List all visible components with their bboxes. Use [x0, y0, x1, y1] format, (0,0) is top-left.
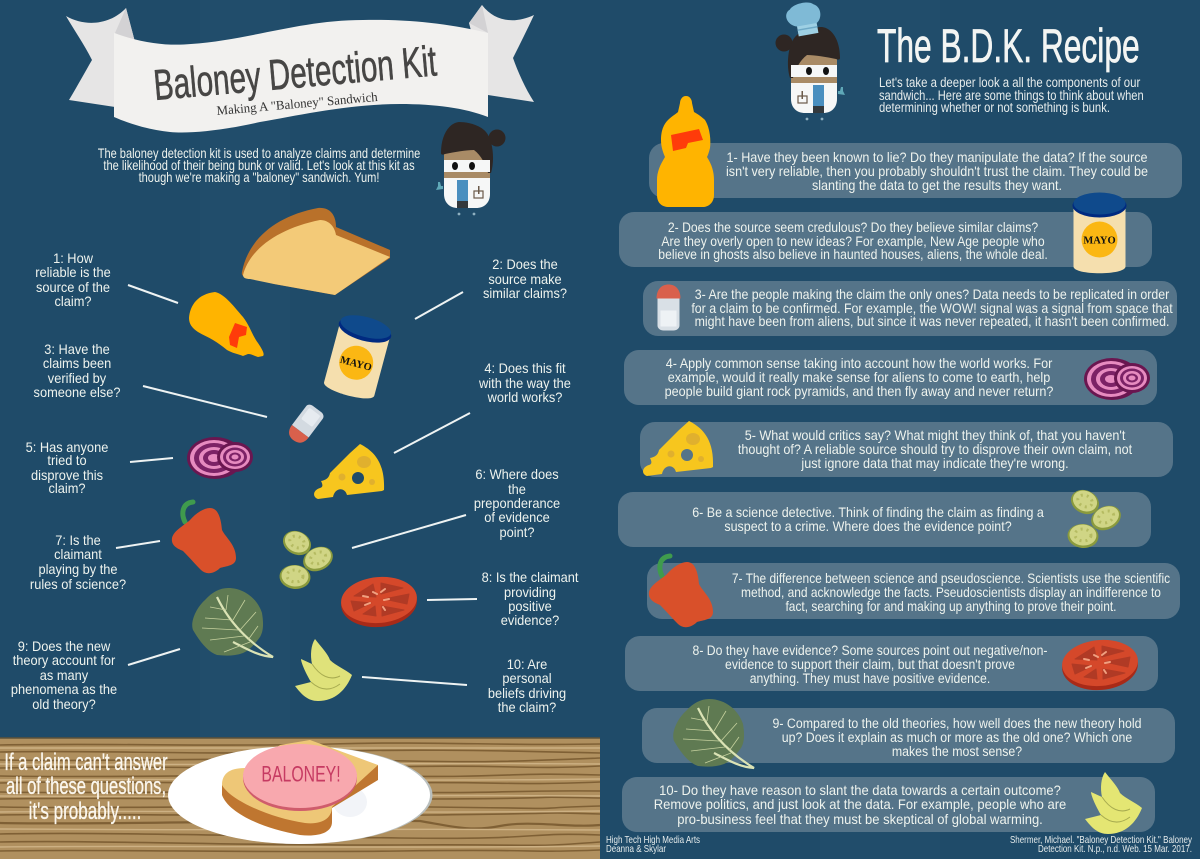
question 9: as many — [40, 668, 89, 683]
step 7 text: 7- The difference between science and pseudoscience. Scientists use the scientific — [732, 570, 1171, 586]
question 3: 3: Have the — [44, 342, 110, 357]
step 1 text — [726, 150, 1148, 193]
step 8 text — [693, 642, 1047, 686]
step 1 text: 1- Have they been known to lie? Do they manipulate the data? If the source — [726, 150, 1148, 165]
character: chef scientist — [776, 0, 845, 120]
connector lines — [116, 285, 477, 685]
question 2: similar claims? — [483, 286, 567, 301]
step 10 text: pro-business feel that they must be skeptical of global warming. — [677, 812, 1043, 827]
question 7: rules of science? — [30, 577, 126, 592]
step 5 text: 5- What would critics say? What might they think of, that you haven't — [745, 428, 1126, 443]
closing statement: all of these questions, — [6, 773, 166, 800]
panel: step 3 — [643, 281, 1177, 336]
question 3: verified by — [48, 371, 107, 386]
question 1: 1: How — [53, 251, 93, 266]
step 3 text: might have been from aliens, but since it was never repeated, it hasn't been confirmed. — [695, 313, 1169, 329]
question 2: 2: Does the — [492, 257, 558, 272]
step 4 text — [665, 356, 1053, 399]
step 1 text: slanting the data to get the results they want. — [812, 178, 1062, 193]
question 1 — [35, 251, 111, 309]
footer citation: Shermer, Michael. "Baloney Detection Kit." Baloney — [1010, 834, 1192, 845]
question 8: positive — [508, 599, 552, 614]
panel: step 10 — [622, 772, 1155, 834]
step 3 text: for a claim to be confirmed. For example, the WOW! signal was a signal from space that — [691, 300, 1173, 316]
icon: salt shaker upright — [656, 284, 680, 330]
step 7 text: fact, searching for and making up anything to prove their point. — [785, 598, 1117, 614]
step 10 text: 10- Do they have reason to slant the data towards a certain outcome? — [659, 783, 1061, 798]
question 8: 8: Is the claimant — [482, 570, 579, 585]
icon: mayo jar — [321, 310, 394, 402]
question 9: old theory? — [32, 697, 96, 712]
question 5: tried to — [47, 453, 87, 468]
step 7 text — [732, 570, 1171, 614]
icon: salt shaker — [285, 403, 325, 447]
step 9 text: makes the most sense? — [892, 743, 1022, 759]
footer credits — [606, 834, 700, 854]
question 5: 5: Has anyone — [26, 440, 108, 455]
question 10: the claim? — [498, 700, 556, 715]
icon: tomato slice — [339, 574, 419, 630]
question 10 — [488, 657, 566, 715]
icon: bread slice — [242, 208, 390, 295]
question 8: evidence? — [501, 613, 559, 628]
step 8 text: 8- Do they have evidence? Some sources point out negative/non- — [693, 642, 1047, 658]
icon: avocado slices — [295, 639, 352, 701]
panel: step 2 — [619, 212, 1152, 267]
question 3 — [34, 342, 120, 400]
icon: tomato slice — [1060, 637, 1140, 693]
step 9 text — [773, 715, 1141, 759]
table with wood grain — [0, 738, 600, 859]
title: Baloney Detection Kit — [152, 37, 438, 109]
title banner — [66, 5, 534, 133]
question 5 — [26, 440, 108, 496]
question 4: with the way the — [478, 376, 571, 391]
step 4 text: example, would it really make sense for aliens to come to earth, help — [668, 370, 1050, 385]
recipe intro: sandwich... Here are some things to think about when — [879, 88, 1144, 103]
recipe intro: determining whether or not something is bunk. — [879, 100, 1110, 115]
step 7 text: method, and acknowledge the facts. Pseudoscientists display an indifference to — [741, 584, 1161, 600]
intro text: The baloney detection kit is used to analyze claims and determine — [98, 146, 420, 161]
icon: bell pepper — [172, 502, 236, 573]
icon: mustard bottle — [189, 292, 264, 357]
step 5 text: just ignore data that may indicate they're wrong. — [800, 456, 1069, 471]
question 4: 4: Does this fit — [484, 361, 566, 376]
step 2 text — [658, 219, 1048, 262]
panel: step 9 — [642, 699, 1175, 768]
footer citation — [1010, 834, 1192, 854]
step 3 text — [691, 286, 1173, 329]
icon: cheese — [643, 421, 713, 476]
question 2 — [483, 257, 567, 301]
question 9: 9: Does the new — [18, 639, 111, 654]
icon: cucumber slices — [1067, 485, 1125, 549]
icon: avocado slices — [1085, 772, 1142, 834]
step 8 text: evidence to support their claim, but that doesn't prove — [725, 656, 1015, 672]
step 5 text — [738, 428, 1133, 471]
step 4 text: 4- Apply common sense taking into account how the world works. For — [666, 356, 1053, 371]
panel: step 5 — [640, 421, 1173, 477]
step 4 text: people build giant rock pyramids, and then fly away and never return? — [665, 384, 1053, 399]
question 10: beliefs driving — [488, 686, 566, 701]
question 1: claim? — [54, 294, 92, 309]
question 2: source make — [488, 272, 562, 287]
icon: cucumber slices — [279, 526, 337, 590]
question 6: of evidence — [484, 510, 550, 525]
panel: step 8 — [625, 636, 1158, 693]
recipe title: The B.D.K. Recipe — [877, 21, 1140, 73]
step 1 text: isn't very reliable, then you probably shouldn't trust the claim. They could be — [726, 164, 1148, 179]
question 1: reliable is the — [35, 265, 111, 280]
question 10: personal — [502, 671, 552, 686]
icon: mayo jar: MAYO — [339, 355, 373, 374]
question 6: point? — [500, 525, 534, 540]
question 4 — [478, 361, 571, 405]
question 9: phenomena as the — [11, 682, 117, 697]
question 3: someone else? — [34, 385, 120, 400]
panel: step 7 — [647, 556, 1180, 627]
step 6 text — [692, 505, 1045, 534]
step 3 text: 3- Are the people making the claim the only ones? Data needs to be replicated in order — [695, 286, 1170, 302]
question 5: claim? — [48, 481, 86, 496]
closing statement — [4, 749, 168, 825]
question 10: 10: Are — [507, 657, 547, 672]
question 4: world works? — [487, 390, 562, 405]
panel: step 6 — [618, 485, 1151, 549]
step 9 text: 9- Compared to the old theories, how well does the new theory hold — [773, 715, 1141, 731]
step 5 text: thought of? A reliable source should try to disprove their own claim, not — [738, 442, 1133, 457]
question 8 — [482, 570, 579, 628]
icon: mustard bottle upright — [657, 96, 714, 207]
icon: mayo jar upright — [1072, 192, 1126, 273]
step 6 text: 6- Be a science detective. Think of finding the claim as finding a — [692, 505, 1045, 520]
question 9 — [11, 639, 117, 712]
footer credits: Deanna & Skylar — [606, 843, 666, 854]
step 8 text: anything. They must have positive evidence. — [750, 670, 990, 686]
panel: step 1 — [649, 143, 1182, 198]
icon: mayo jar upright: MAYO — [1083, 236, 1116, 246]
panel: step 4 — [624, 350, 1157, 405]
footer credits: High Tech High Media Arts — [606, 834, 700, 845]
intro text: the likelihood of their being bunk or valid. Let's look at this kit as — [103, 158, 415, 173]
step 6 text: suspect to a crime. Where does the evidence point? — [724, 519, 1012, 534]
question 6 — [474, 467, 560, 540]
icon: cheese — [314, 444, 384, 499]
question 8: providing — [504, 585, 556, 600]
question 6: preponderance — [474, 496, 560, 511]
plate with baloney sandwich — [168, 740, 432, 844]
step 10 text: Remove politics, and just look at the data. For example, people who are — [654, 797, 1066, 812]
question 7: playing by the — [38, 562, 118, 577]
closing statement: it's probably..... — [29, 798, 141, 825]
question 7 — [30, 533, 126, 592]
recipe intro — [879, 75, 1144, 115]
question 5: disprove this — [31, 468, 103, 483]
step 2 text: 2- Does the source seem credulous? Do they believe similar claims? — [668, 219, 1038, 235]
icon: onion — [1084, 358, 1150, 400]
footer citation: Detection Kit. N.p., n.d. Web. 15 Mar. 2017. — [1038, 843, 1192, 854]
character: scientist — [436, 122, 506, 215]
step 2 text: Are they overly open to new ideas? For example, New Age people who — [661, 233, 1045, 249]
question 6: 6: Where does — [475, 467, 559, 482]
question 6: the — [508, 482, 526, 497]
intro text — [98, 146, 420, 185]
step 10 text — [654, 783, 1066, 827]
question 7: claimant — [54, 547, 102, 562]
step 9 text: up? Does it explain as much or more as the old one? Which one — [782, 729, 1132, 745]
subtitle: Making A "Baloney" Sandwich — [216, 89, 379, 118]
icon: lettuce leaf — [673, 699, 754, 768]
intro text: though we're making a "baloney" sandwich. Yum! — [139, 170, 379, 185]
chef hat — [784, 0, 824, 38]
icon: lettuce leaf — [192, 588, 273, 657]
icon: onion — [187, 437, 253, 479]
recipe intro: Let's take a deeper look a all the components of our — [879, 75, 1140, 90]
closing statement: If a claim can't answer — [4, 749, 168, 776]
question 9: theory account for — [13, 653, 116, 668]
baloney slice — [243, 745, 357, 811]
icon: bell pepper — [649, 556, 713, 627]
step 2 text: believe in ghosts also believe in haunted houses, aliens, the whole deal. — [658, 246, 1048, 262]
question 3: claims been — [43, 356, 111, 371]
question 7: 7: Is the — [55, 533, 101, 548]
question 1: source of the — [36, 280, 110, 295]
plate with baloney sandwich: BALONEY! — [261, 763, 341, 787]
